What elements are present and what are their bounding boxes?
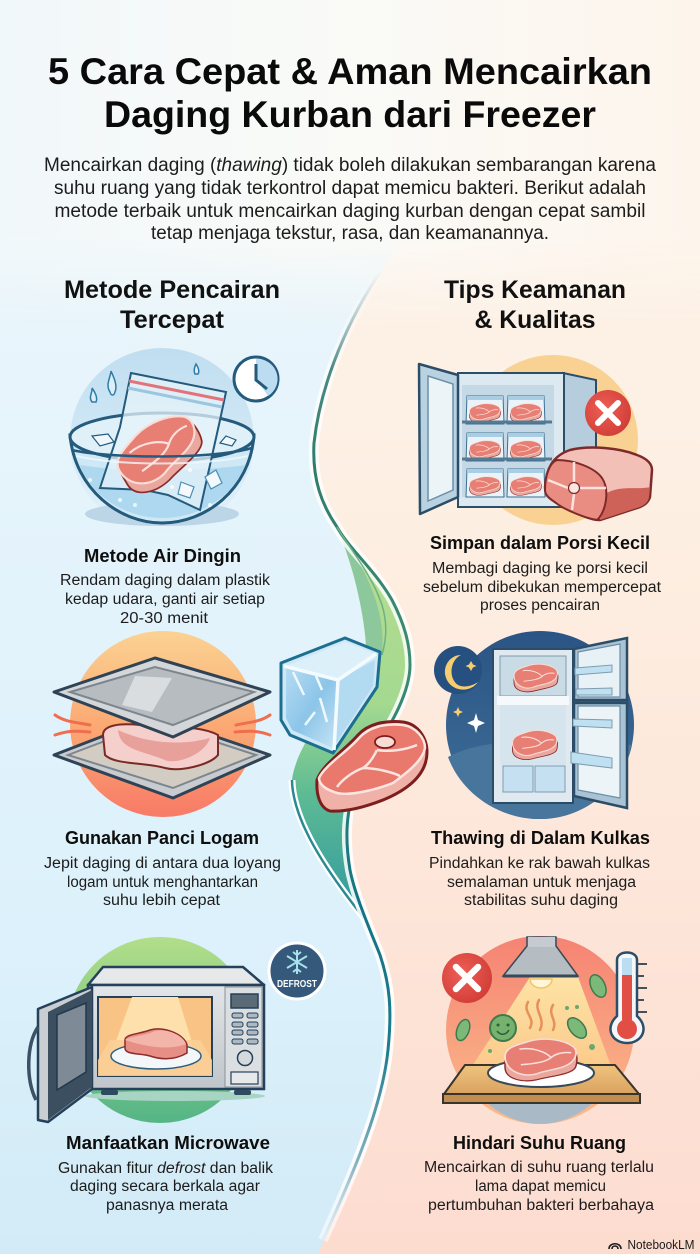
icon: thermometer [610,952,647,1043]
description: Rendam daging dalam plastik [60,572,270,589]
description [429,855,650,909]
description [44,855,281,909]
description: Gunakan fitur defrost dan balik [58,1160,273,1177]
description: daging secara berkala agar [70,1178,260,1195]
intro text [44,155,656,244]
description: stabilitas suhu daging [464,892,618,909]
description: Jepit daging di antara dua loyang [44,855,281,872]
description: sebelum dibekukan mempercepat [423,579,662,596]
intro text: metode terbaik untuk mencairkan daging kurban dengan cepat sambil [54,201,645,222]
description: panasnya merata [106,1197,228,1214]
description: Membagi daging ke porsi kecil [432,560,648,577]
icon: bacteria on meat under lamp [443,936,640,1124]
heading: Tips Keamanan & Kualitas [444,276,626,334]
description: Pindahkan ke rak bawah kulkas [429,855,650,872]
panel: avoid room temperature [424,936,654,1214]
label: Gunakan Panci Logam: Gunakan Panci Logam [65,828,259,848]
panel: small portions [419,355,662,614]
label: Manfaatkan Microwave: Manfaatkan Microwave [66,1133,270,1153]
panel: microwave method [29,937,325,1214]
icon: freezer with bagged portions [419,355,638,525]
logo: NotebookLM: NotebookLM [628,1238,694,1252]
label: Hindari Suhu Ruang: Hindari Suhu Ruang [453,1133,626,1153]
icon: raw steak [317,722,427,811]
heading: Metode Pencairan Tercepat [64,276,280,334]
icon: microwave with open door [29,937,265,1123]
intro text: Mencairkan daging (thawing) tidak boleh dilakukan sembarangan karena [44,155,656,176]
panel: thawing in the fridge [429,631,650,909]
heading: Tips Keamanan & Kualitas: & Kualitas [474,306,596,334]
icon: red cross [442,953,492,1003]
icon: large frozen meat block [545,448,652,520]
icon: meat between metal trays [54,631,270,817]
label: Metode Air Dingin: Metode Air Dingin [84,546,241,566]
icon: ice cube [281,638,380,753]
description: proses pencairan [480,597,600,614]
description: 20-30 menit [120,610,209,627]
central wave divider [292,270,410,1240]
description [423,560,662,614]
label: Simpan dalam Porsi Kecil: Simpan dalam Porsi Kecil [430,533,650,553]
description [58,1160,273,1214]
icon: meat bag in bowl of water [70,348,254,532]
title: Daging Kurban dari Freezer [104,94,596,135]
intro text: suhu ruang yang tidak terkontrol dapat memicu bakteri. Berikut adalah [54,178,646,199]
icon: red cross [585,390,631,436]
icon: moon and stars badge [434,646,482,694]
description: kedap udara, ganti air setiap [65,591,265,608]
icon: open fridge at night [446,631,634,819]
panel: cold water method [60,348,278,627]
description: logam untuk menghantarkan [67,874,258,891]
description: lama dapat memicu [475,1178,606,1195]
heading: Metode Pencairan Tercepat: Metode Pencairan [64,276,280,304]
label: Thawing di Dalam Kulkas: Thawing di Dalam Kulkas [431,828,650,848]
title [48,51,652,135]
icon: clock [234,357,278,401]
badge: defrost: DEFROST [277,979,317,990]
description [60,572,270,627]
title: 5 Cara Cepat & Aman Mencairkan [48,51,652,92]
intro text: tetap menjaga tekstur, rasa, dan keamanannya. [151,223,549,244]
panel: metal pans method [44,631,281,909]
description [424,1159,654,1214]
description: Mencairkan di suhu ruang terlalu [424,1159,654,1176]
badge: defrost [269,943,325,999]
description: semalaman untuk menjaga [447,874,636,891]
heading: Metode Pencairan Tercepat: Tercepat [120,306,225,334]
heading: Tips Keamanan & Kualitas: Tips Keamanan [444,276,626,304]
description: suhu lebih cepat [103,892,221,909]
description: pertumbuhan bakteri berbahaya [428,1197,654,1214]
